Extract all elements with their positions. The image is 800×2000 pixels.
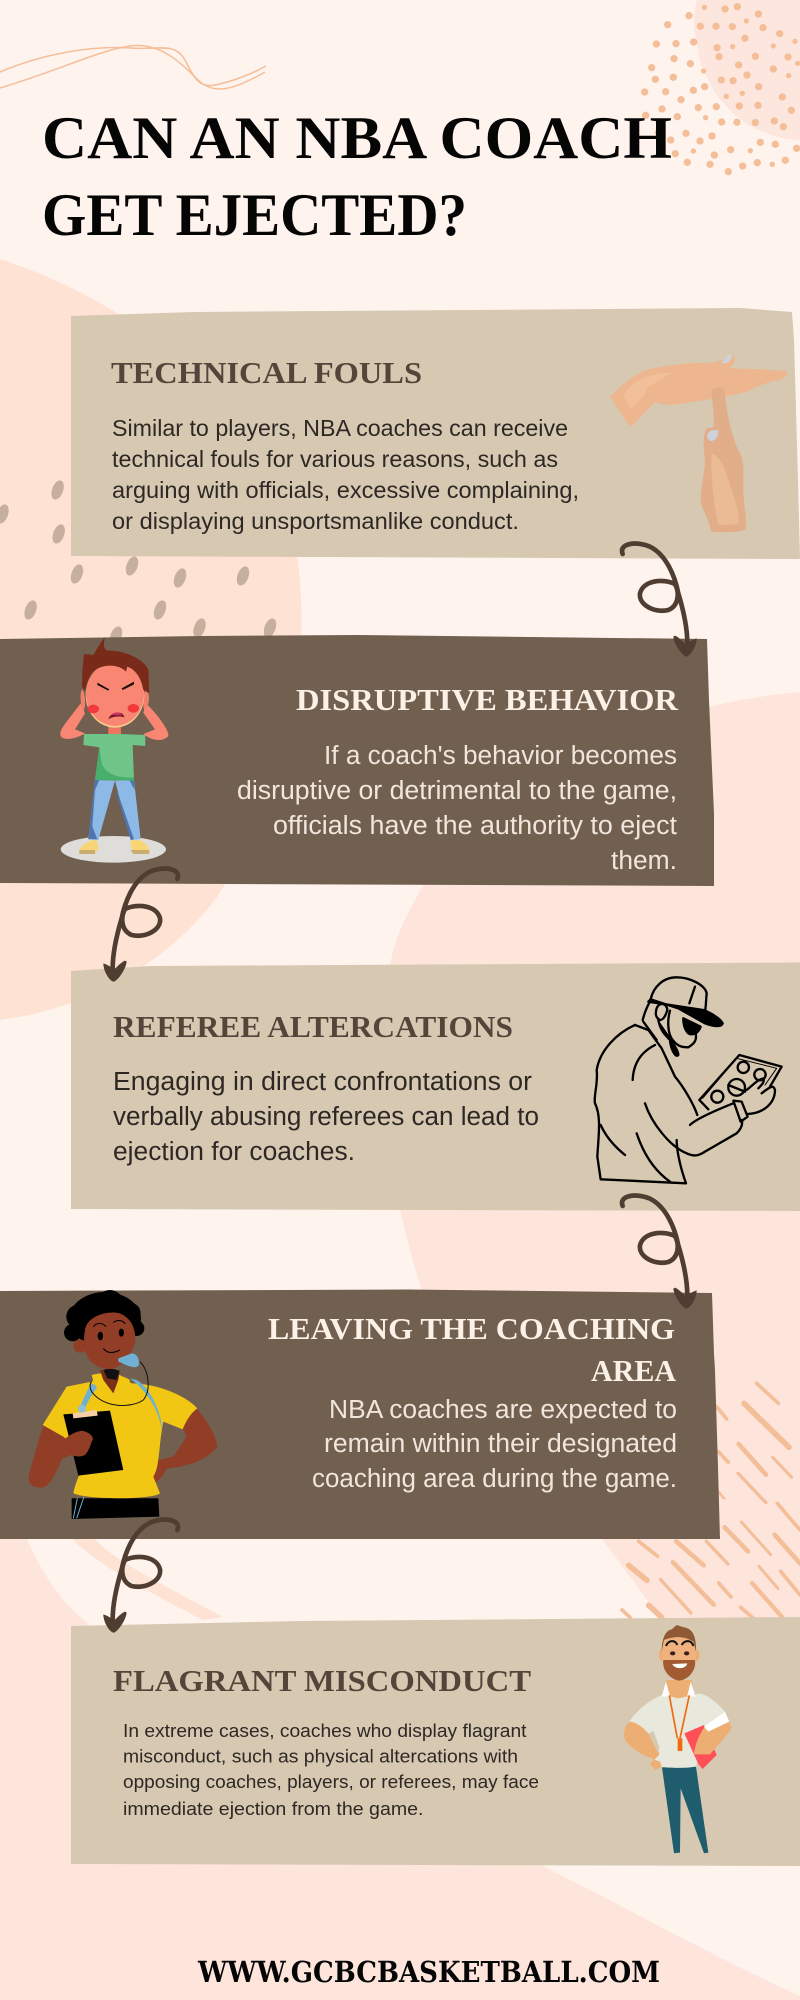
- panel: referee altercations: [71, 962, 800, 1211]
- text: disruptive behavior body: officials have the authority to eject: [273, 812, 677, 840]
- decorative wavy lines: [0, 45, 266, 89]
- text: flagrant misconduct body: In extreme cases, coaches who display flagrant: [123, 1720, 526, 1741]
- text: technical fouls body: arguing with officials, excessive complaining,: [112, 477, 579, 503]
- decorative stripes lower right: [622, 1383, 800, 1618]
- text: leaving the coaching area body: NBA coaches are expected to: [329, 1396, 677, 1424]
- arrow: technical fouls to disruptive behavior: [622, 544, 697, 657]
- text: disruptive behavior body: If a coach's behavior becomes: [324, 742, 677, 770]
- text: technical fouls body: [112, 415, 579, 534]
- arrow: leaving the coaching area to flagrant misconduct: [103, 1520, 178, 1633]
- heading: flagrant misconduct: FLAGRANT MISCONDUCT: [113, 1663, 531, 1698]
- text: disruptive behavior body: disruptive or detrimental to the game,: [237, 777, 677, 805]
- text: flagrant misconduct body: [123, 1720, 539, 1819]
- text: referee altercations body: [113, 1068, 539, 1166]
- icon: angry boy: [60, 637, 168, 863]
- footer website: WWW.GCBCBASKETBALL.COM: [197, 1955, 660, 1989]
- text: referee altercations body: Engaging in direct confrontations or: [113, 1068, 533, 1096]
- text: leaving the coaching area body: [312, 1396, 677, 1493]
- title: [42, 105, 672, 248]
- text: disruptive behavior body: [237, 742, 677, 875]
- decorative oval dots left: [0, 479, 279, 647]
- heading: disruptive behavior: DISRUPTIVE BEHAVIOR: [296, 682, 679, 717]
- decorative dots top right: [641, 3, 800, 175]
- icon: man with banknote: [595, 977, 782, 1183]
- title: GET EJECTED?: [42, 182, 467, 248]
- text: technical fouls body: Similar to players, NBA coaches can receive: [112, 415, 568, 441]
- heading: referee altercations: REFEREE ALTERCATIONS: [113, 1009, 513, 1044]
- icon: coach with whistle and clipboard: [29, 1290, 217, 1519]
- text: disruptive behavior body: them.: [611, 847, 677, 875]
- panel: flagrant misconduct: [71, 1617, 800, 1866]
- panel: disruptive behavior: [0, 635, 714, 886]
- icon: bearded coach with red folder: [624, 1625, 732, 1853]
- panel: technical fouls: [71, 308, 800, 559]
- heading: leaving the coaching area: LEAVING THE COACHING: [268, 1311, 675, 1346]
- panel: leaving the coaching area: [0, 1290, 720, 1539]
- icon: time-out hands: [610, 354, 787, 532]
- text: flagrant misconduct body: misconduct, such as physical altercations with: [123, 1746, 518, 1766]
- text: leaving the coaching area body: coaching area during the game.: [312, 1465, 677, 1493]
- text: leaving the coaching area body: remain within their designated: [324, 1430, 677, 1458]
- arrow: referee altercations to leaving the coaching area: [622, 1196, 697, 1309]
- arrow: disruptive behavior to referee altercations: [103, 869, 178, 982]
- heading: leaving the coaching area: AREA: [591, 1353, 677, 1388]
- text: referee altercations body: ejection for coaches.: [113, 1138, 355, 1166]
- text: referee altercations body: verbally abusing referees can lead to: [113, 1103, 539, 1131]
- text: technical fouls body: technical fouls for various reasons, such as: [112, 446, 558, 472]
- text: flagrant misconduct body: immediate ejection from the game.: [123, 1798, 424, 1819]
- text: technical fouls body: or displaying unsportsmanlike conduct.: [112, 508, 519, 534]
- heading: leaving the coaching area: [268, 1311, 677, 1388]
- text: flagrant misconduct body: opposing coaches, players, or referees, may face: [123, 1771, 539, 1792]
- title: CAN AN NBA COACH: [42, 105, 672, 171]
- heading: technical fouls: TECHNICAL FOULS: [111, 355, 422, 390]
